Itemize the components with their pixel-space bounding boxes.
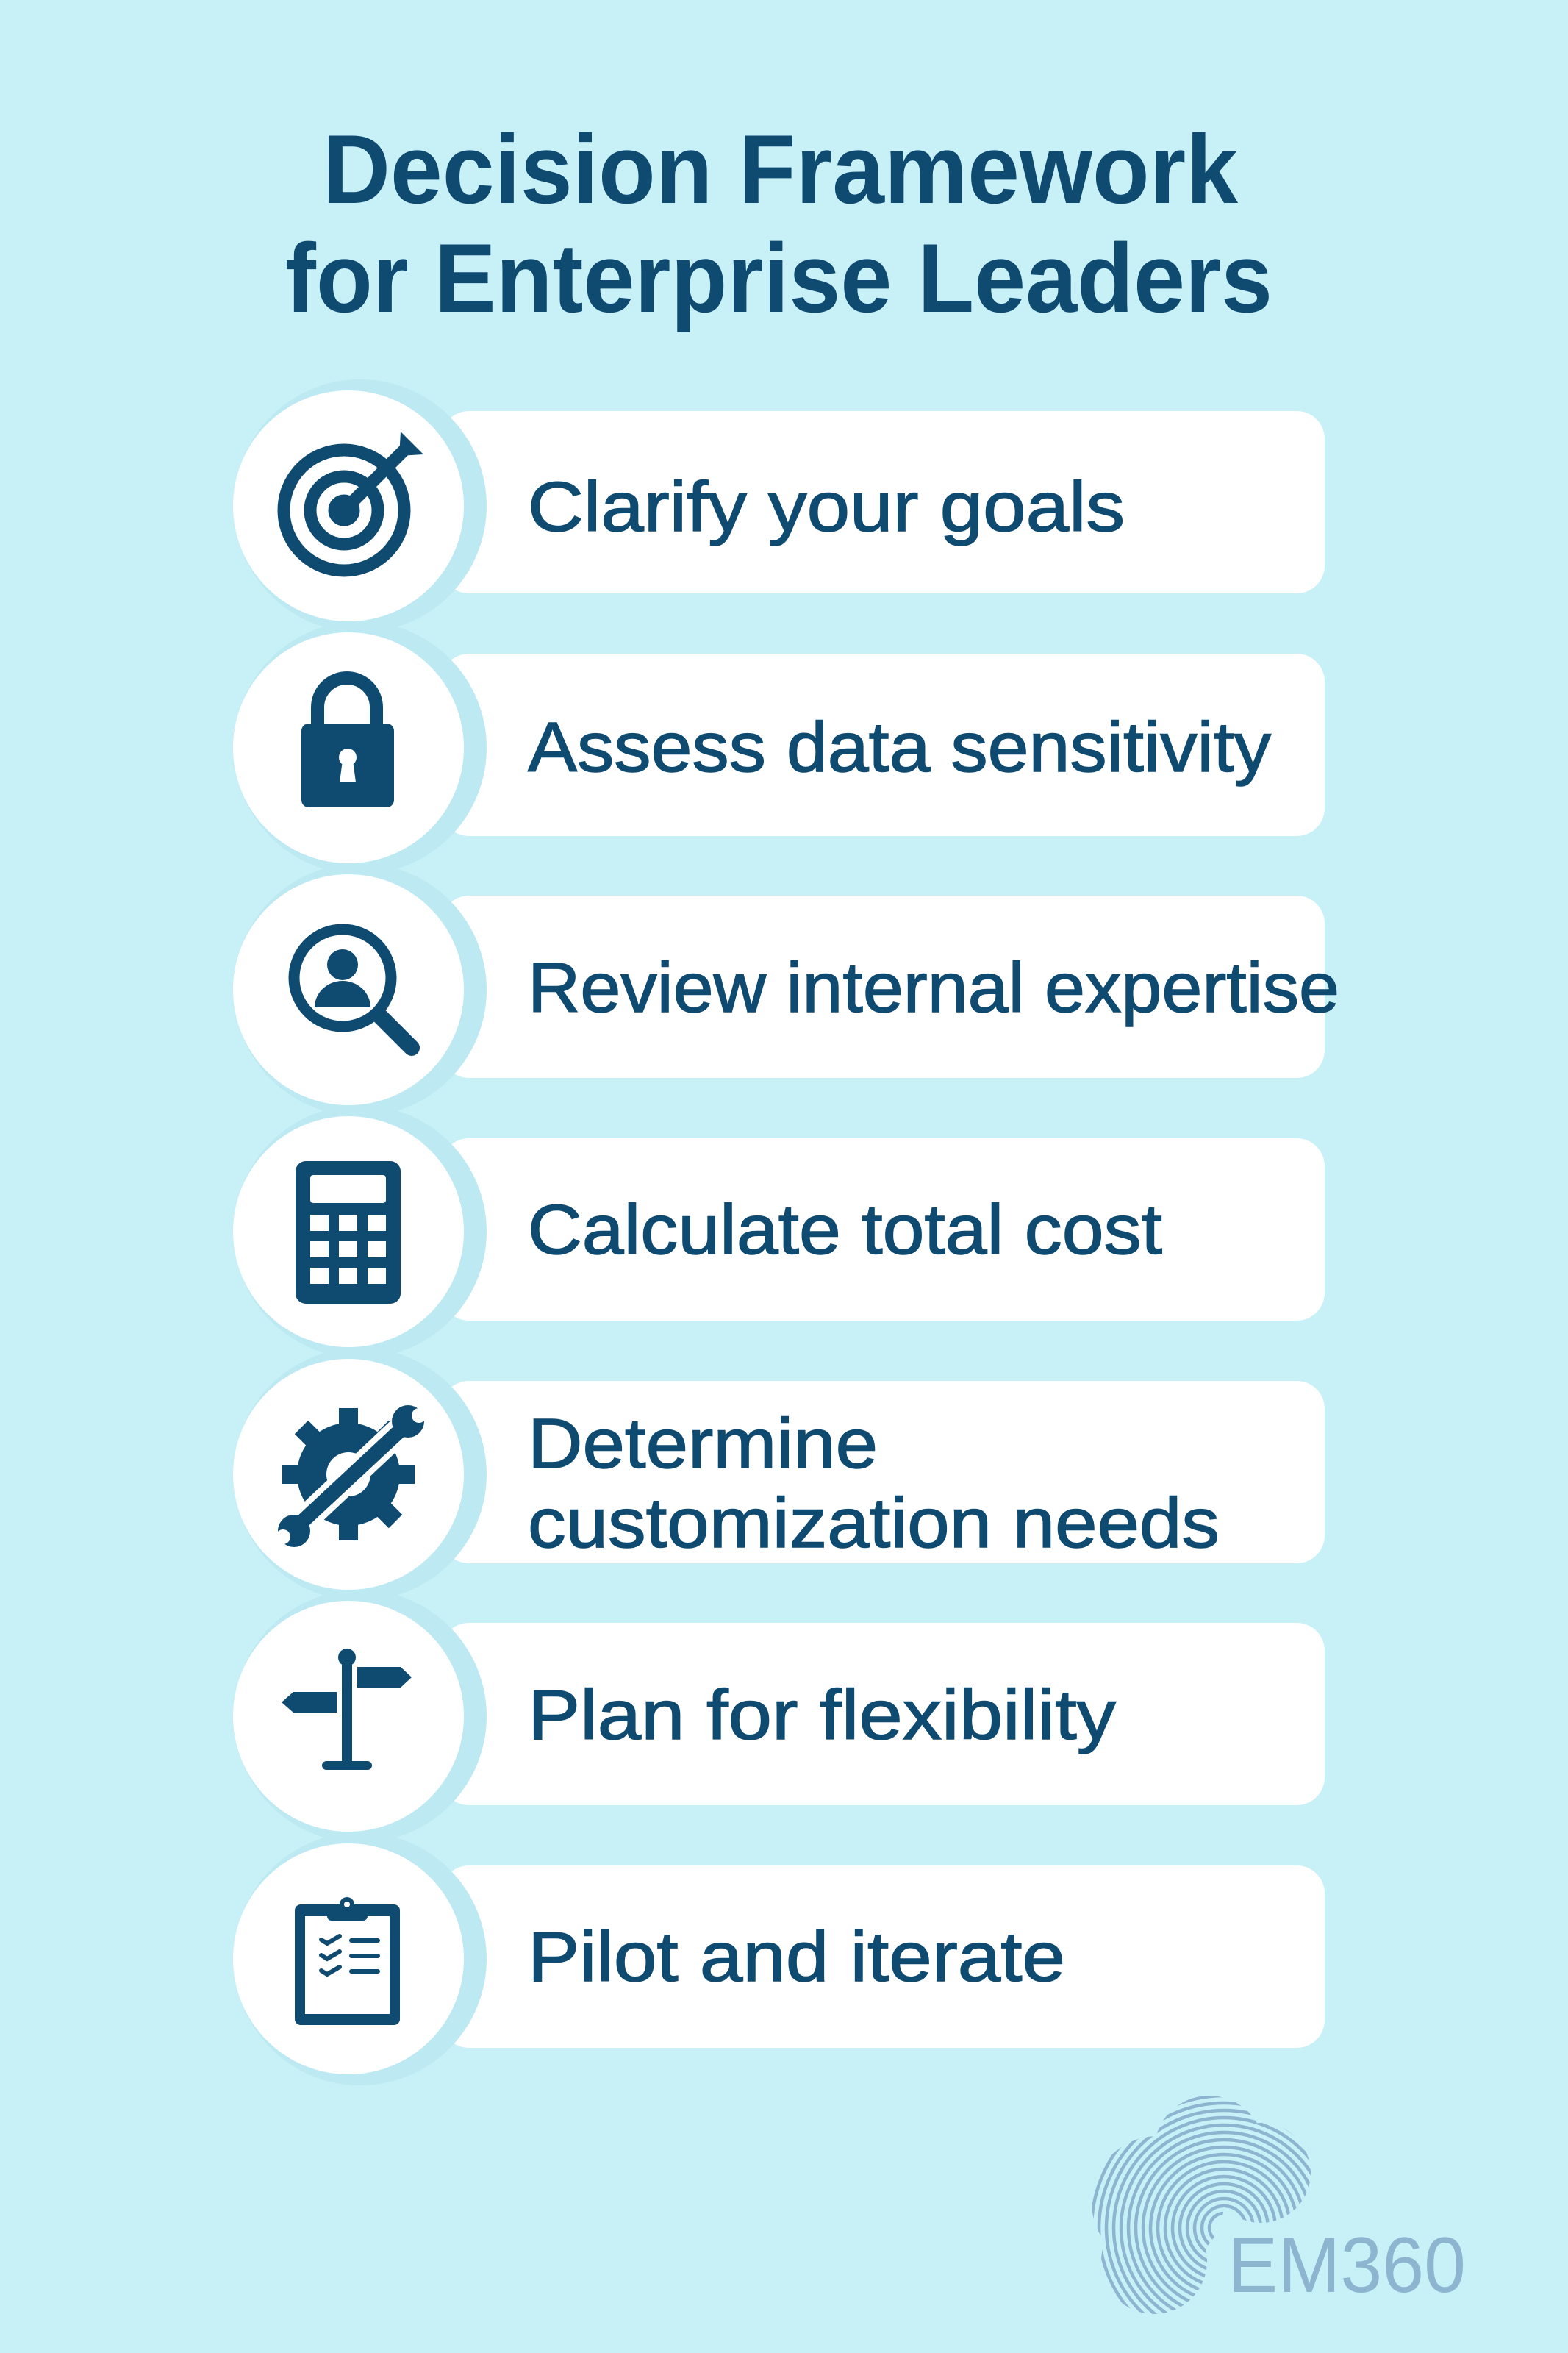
icon: signpost: [282, 1649, 412, 1770]
row 5: customization: [233, 1348, 1325, 1601]
title: for Enterprise Leaders: [285, 224, 1272, 333]
icon: clipboard: [295, 1897, 400, 2025]
text: assess: Assess data sensitivity: [528, 708, 1271, 787]
text: determine: Determine: [528, 1404, 878, 1483]
text: clarify: Clarify your goals: [528, 468, 1125, 546]
row 3: internal expertise: [233, 863, 1339, 1116]
text: pilot: Pilot and iterate: [528, 1918, 1065, 1996]
row 4: total cost: [233, 1105, 1325, 1358]
row 2: data sensitivity: [233, 621, 1325, 874]
text: EM360: EM360: [1228, 2221, 1466, 2309]
text: calculate: Calculate total cost: [528, 1190, 1162, 1269]
icon: cloud arcs: [1092, 2096, 1311, 2314]
logo: EM360: [1092, 2096, 1463, 2314]
text: plan: Plan for flexibility: [528, 1676, 1116, 1754]
row 6: flexibility: [233, 1590, 1325, 1843]
icon: gear wrench: [276, 1405, 426, 1547]
text: determine: [528, 1404, 1220, 1563]
title: [285, 115, 1272, 333]
icon: target: [284, 432, 423, 571]
row 1: clarify goals: [233, 379, 1325, 632]
icon: calculator: [296, 1161, 401, 1304]
text: determine: customization needs: [528, 1484, 1220, 1563]
row 7: pilot: [233, 1832, 1325, 2085]
text: review: Review internal expertise: [528, 949, 1339, 1027]
icon: lock: [301, 678, 394, 807]
icon: magnifier person: [294, 929, 412, 1048]
title: Decision Framework: [323, 115, 1239, 224]
